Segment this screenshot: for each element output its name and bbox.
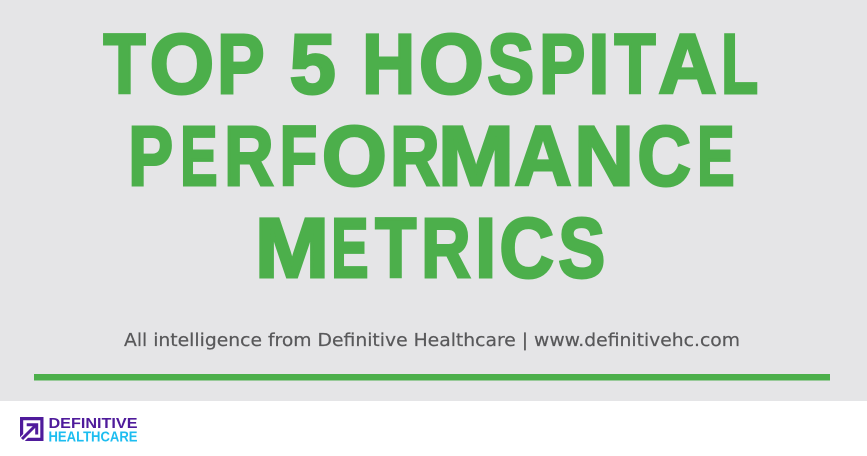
title: E: [180, 109, 217, 203]
title: C: [638, 109, 691, 203]
icon: square with arrow: [19, 417, 44, 442]
wordmark: healthcare: HEALTHCARE: [48, 429, 138, 445]
title: O: [150, 17, 214, 111]
title: H: [362, 17, 415, 111]
title: M: [438, 109, 514, 203]
title: A: [658, 17, 716, 111]
title: S: [558, 201, 605, 295]
title: L: [721, 17, 758, 111]
title: M: [255, 201, 329, 295]
title: T: [375, 201, 416, 295]
wordmark: definitive: DEFINITIVE: [48, 415, 138, 432]
title: N: [574, 109, 634, 203]
title: O: [322, 109, 387, 203]
title: F: [280, 109, 317, 203]
title: P: [128, 109, 173, 203]
title: R: [421, 201, 470, 295]
title: P: [539, 17, 585, 111]
title: I: [588, 17, 609, 111]
title: R: [224, 109, 274, 203]
title: C: [500, 201, 554, 295]
title: E: [331, 201, 368, 295]
title: A: [514, 109, 572, 203]
title: [104, 17, 758, 295]
title: O: [419, 17, 484, 111]
title: R: [390, 109, 440, 203]
title: 5: [290, 17, 336, 111]
title: P: [217, 17, 263, 111]
source line: All intelligence from Definitive Healthcare | www.definitivehc.com: [124, 331, 740, 351]
title: I: [475, 201, 496, 295]
title: S: [487, 17, 534, 111]
title: T: [104, 17, 146, 111]
title: T: [614, 17, 656, 111]
logo: Definitive Healthcare: [19, 415, 138, 445]
title: E: [697, 109, 734, 203]
green divider bar: [34, 374, 830, 380]
